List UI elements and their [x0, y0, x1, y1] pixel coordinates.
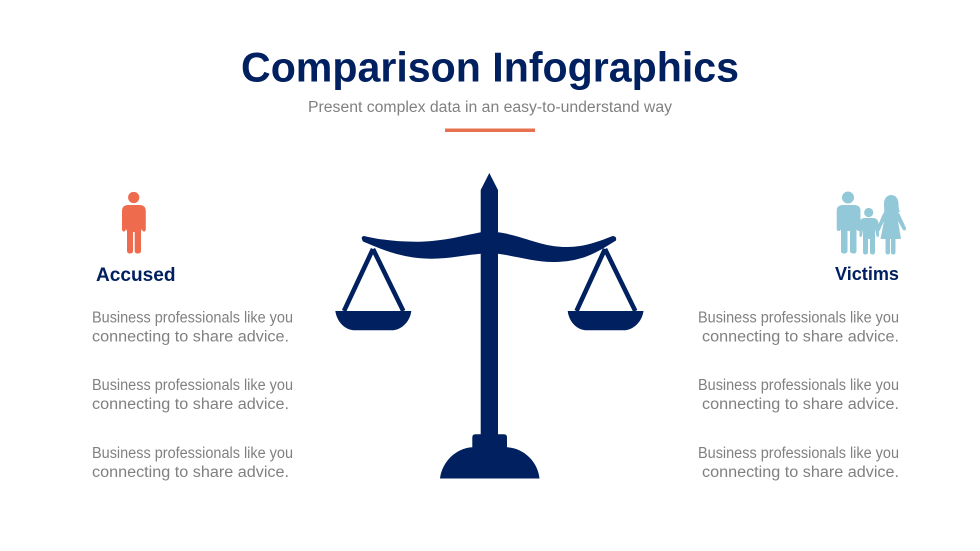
right text block 1: Business professionals like you: [698, 310, 899, 326]
right pan: [568, 249, 644, 330]
man: [837, 192, 860, 254]
subtitle: Present complex data in an easy-to-understand way: [308, 99, 672, 116]
right text block 3: Business professionals like you: [698, 445, 899, 462]
left text block 2: [92, 377, 293, 413]
icon: victims family: [837, 192, 906, 254]
left text block 3: connecting to share advice.: [92, 464, 289, 481]
left text block 1: connecting to share advice.: [92, 329, 289, 346]
right text block 1: [698, 310, 899, 346]
woman: [876, 195, 906, 254]
left text block 3: [92, 445, 293, 481]
right text block 2: connecting to share advice.: [702, 396, 899, 413]
icon: accused person: [122, 192, 146, 254]
right text block 3: connecting to share advice.: [702, 464, 899, 481]
heading: accused: Accused: [96, 265, 176, 286]
left text block 1: [92, 310, 293, 346]
left text block 3: Business professionals like you: [92, 445, 293, 462]
left text block 1: Business professionals like you: [92, 310, 293, 326]
title: Comparison Infographics: [241, 44, 739, 90]
right text block 1: connecting to share advice.: [702, 329, 899, 346]
right text block 3: [698, 445, 899, 481]
left text block 2: connecting to share advice.: [92, 396, 289, 413]
right text block 2: [698, 377, 899, 413]
left text block 2: Business professionals like you: [92, 377, 293, 394]
heading: victims: Victims: [835, 263, 899, 284]
icon: scales of justice: [335, 173, 644, 478]
right text block 2: Business professionals like you: [698, 377, 899, 394]
child: [860, 208, 879, 254]
accent bar: [445, 128, 535, 132]
left pan: [335, 249, 411, 330]
